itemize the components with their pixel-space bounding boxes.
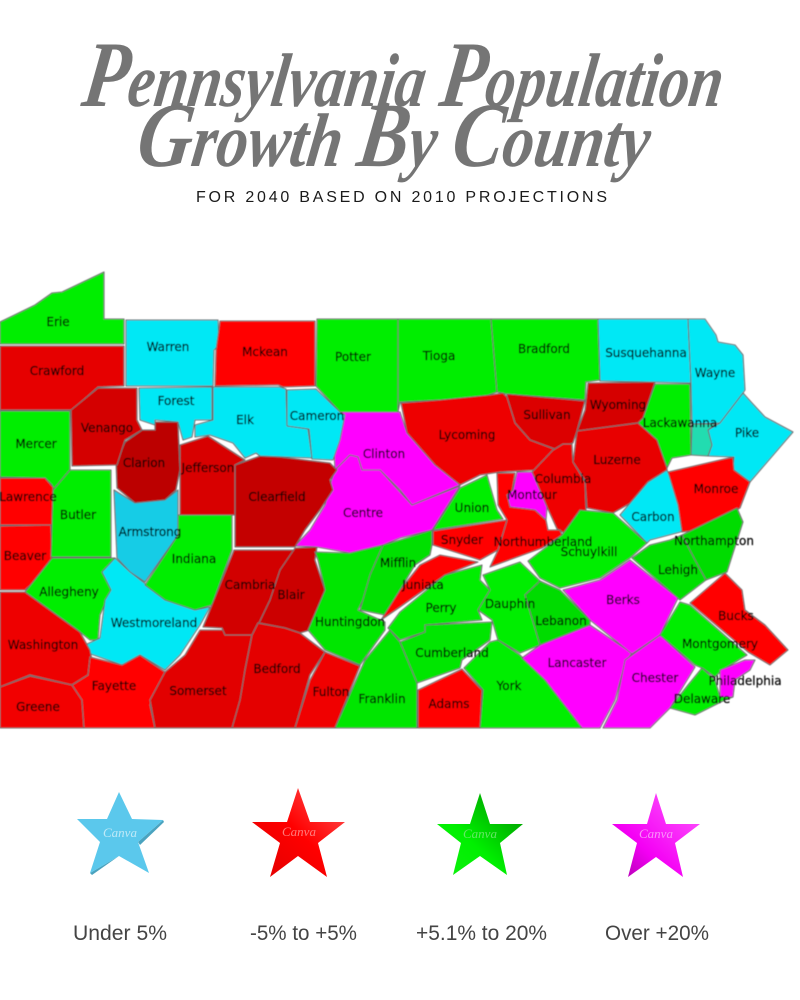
- county: Lawrence: [0, 478, 53, 525]
- county: Juniata: [381, 555, 478, 620]
- county: Washington: [0, 592, 92, 687]
- county: Lancaster: [522, 625, 632, 728]
- county: Fulton: [295, 652, 360, 728]
- county: Sullivan: [507, 394, 585, 449]
- county labels: Indiana: [172, 552, 216, 566]
- county labels: Chester: [632, 671, 678, 685]
- county labels: Clearfield: [248, 490, 306, 504]
- county labels: Berks: [606, 593, 640, 607]
- county: Venango: [71, 388, 142, 466]
- icon: blue star: Canva: [103, 825, 137, 840]
- county: Perry: [388, 565, 490, 640]
- county labels: Cameron: [290, 409, 344, 423]
- county: Franklin: [335, 630, 417, 728]
- county: Beaver: [0, 525, 52, 590]
- county: Snyder: [433, 520, 507, 560]
- label: over +20%: Over +20%: [605, 922, 709, 945]
- county: Lebanon: [525, 581, 590, 645]
- county labels: Potter: [335, 350, 371, 364]
- county: Delaware: [670, 668, 733, 715]
- legend item: -5% to +5%: [250, 788, 357, 945]
- county labels: Franklin: [358, 692, 406, 706]
- county labels: Monroe: [694, 482, 738, 496]
- county labels: Wyoming: [590, 398, 646, 412]
- county labels: Mercer: [15, 437, 57, 451]
- county labels: Mifflin: [380, 556, 416, 570]
- county: Mifflin: [360, 530, 432, 615]
- county: Cambria: [203, 550, 295, 635]
- county: Huntingdon: [308, 545, 385, 665]
- county: Montgomery: [660, 602, 747, 677]
- county labels: Blair: [277, 588, 305, 602]
- legend: [73, 788, 709, 945]
- county: Westmoreland: [85, 558, 210, 670]
- icon: green star: Canva: [463, 826, 497, 841]
- county: Elk: [195, 387, 312, 458]
- county: Adams: [418, 669, 482, 728]
- county labels: Cumberland: [415, 646, 489, 660]
- county labels: Juniata: [401, 578, 444, 592]
- county labels: Washington: [8, 638, 78, 652]
- county labels: Susquehanna: [605, 346, 687, 360]
- county labels: Greene: [16, 700, 60, 714]
- county labels: Clarion: [123, 456, 165, 470]
- icon: red star: [252, 788, 345, 877]
- county: Philadelphia: [720, 660, 755, 697]
- county: Centre: [295, 455, 460, 553]
- county: Bucks: [690, 573, 788, 665]
- county labels: Somerset: [169, 684, 227, 698]
- county: Fayette: [72, 655, 165, 728]
- title: Growth By County: [132, 84, 659, 186]
- county labels: Lebanon: [535, 614, 587, 628]
- county labels: Cambria: [225, 578, 275, 592]
- county labels: Beaver: [4, 549, 46, 563]
- title: Pennsylvania Population: [76, 23, 732, 127]
- county labels: Westmoreland: [111, 616, 197, 630]
- county labels: Bradford: [518, 342, 570, 356]
- county: Wyoming: [577, 382, 655, 431]
- county: Crawford: [0, 346, 124, 410]
- county: Forest: [139, 387, 212, 440]
- county labels: Mckean: [242, 345, 288, 359]
- county labels: Bedford: [253, 662, 301, 676]
- label: under 5%: Under 5%: [73, 922, 167, 945]
- county labels: Forest: [158, 394, 195, 408]
- county labels: Fulton: [313, 685, 349, 699]
- county: Lehigh: [632, 535, 706, 600]
- county: Clearfield: [235, 456, 337, 547]
- county: Tioga: [398, 319, 497, 412]
- county: Jefferson: [180, 436, 245, 515]
- icon: magenta star: [612, 793, 700, 877]
- county labels: Elk: [236, 413, 254, 427]
- county labels: Armstrong: [119, 525, 181, 539]
- county labels: Schuylkill: [561, 545, 617, 559]
- county labels: Union: [455, 501, 489, 515]
- county labels: Lackawanna: [643, 416, 717, 430]
- county: Northampton: [682, 508, 743, 580]
- county labels: Northampton: [674, 534, 754, 548]
- county labels: Luzerne: [593, 453, 641, 467]
- county: Butler: [51, 470, 111, 557]
- county: Dauphin: [478, 562, 540, 653]
- county labels: Perry: [426, 601, 456, 615]
- county labels: Montgomery: [682, 637, 758, 651]
- county labels: Montour: [507, 488, 557, 502]
- county labels: Huntingdon: [315, 615, 385, 629]
- county: Bradford: [491, 319, 600, 400]
- county labels: Erie: [46, 315, 70, 329]
- title: [76, 23, 732, 186]
- icon: blue star: [77, 792, 164, 875]
- county labels: Bucks: [718, 609, 754, 623]
- county: Clarion: [116, 422, 180, 503]
- legend item: over +20%: [605, 793, 709, 945]
- county: Cumberland: [400, 622, 492, 683]
- label: +5.1% to 20%: +5.1% to 20%: [416, 922, 547, 945]
- county labels: Crawford: [30, 364, 84, 378]
- county: Columbia: [532, 444, 586, 535]
- county: Susquehanna: [598, 319, 691, 383]
- county: Armstrong: [114, 490, 178, 582]
- county labels: Tioga: [422, 349, 455, 363]
- county labels: Dauphin: [485, 597, 535, 611]
- county: Lycoming: [401, 393, 554, 485]
- county labels: Butler: [60, 508, 96, 522]
- county labels: Lancaster: [548, 656, 606, 670]
- icon: green star: [437, 793, 523, 875]
- county labels: Lycoming: [439, 428, 495, 442]
- county: Luzerne: [573, 423, 667, 513]
- county: Indiana: [145, 515, 232, 610]
- legend item: +5.1% to 20%: [416, 793, 547, 945]
- county labels: Northumberland: [494, 535, 592, 549]
- county: Montour: [507, 472, 547, 520]
- label: -5% to +5%: -5% to +5%: [250, 922, 357, 945]
- county: Clinton: [334, 412, 460, 505]
- county: Potter: [316, 319, 398, 412]
- county labels: Lawrence: [0, 490, 57, 504]
- county labels: [0, 315, 782, 714]
- county labels: Sullivan: [523, 408, 571, 422]
- county: Somerset: [150, 630, 252, 728]
- county labels: York: [496, 679, 522, 693]
- county labels: Venango: [81, 421, 133, 435]
- county labels: Philadelphia: [708, 674, 782, 688]
- county: Warren: [126, 320, 219, 386]
- county: Bedford: [232, 623, 325, 728]
- county labels: Delaware: [674, 692, 730, 706]
- county: Union: [433, 475, 503, 530]
- county: Erie: [0, 272, 124, 344]
- county: Berks: [563, 560, 678, 654]
- county: Cameron: [287, 389, 345, 460]
- county labels: Clinton: [363, 447, 405, 461]
- county: Wayne: [688, 319, 745, 424]
- county labels: Warren: [147, 340, 189, 354]
- map: Pennsylvania counties: [0, 272, 793, 728]
- county shapes: [0, 272, 793, 728]
- county: Carbon: [620, 470, 688, 543]
- county: Lackawanna east strip: [691, 424, 716, 456]
- county labels: Fayette: [92, 679, 136, 693]
- county: Pike: [708, 393, 793, 482]
- county labels: Wayne: [695, 366, 735, 380]
- county: Allegheny: [25, 558, 115, 640]
- county labels: Adams: [429, 697, 469, 711]
- county: Blair: [259, 547, 325, 633]
- county labels: Jefferson: [181, 461, 234, 475]
- county: Lackawanna: [638, 384, 691, 468]
- icon: red star: Canva: [282, 824, 316, 839]
- county: Schuylkill: [528, 510, 647, 588]
- county: Monroe: [668, 457, 750, 532]
- county: Northumberland: [490, 473, 562, 567]
- icon: magenta star: Canva: [639, 826, 673, 841]
- county labels: Carbon: [631, 510, 675, 524]
- county labels: Allegheny: [39, 585, 99, 599]
- county: McKean: [215, 321, 315, 387]
- county labels: Centre: [343, 506, 383, 520]
- county: Greene: [0, 676, 84, 728]
- county labels: Lehigh: [658, 563, 698, 577]
- county: Mercer: [0, 411, 70, 490]
- county labels: Pike: [735, 426, 759, 440]
- legend item: under 5%: [73, 792, 167, 945]
- county labels: Columbia: [535, 472, 591, 486]
- county labels: Snyder: [441, 533, 483, 547]
- county: Chester: [603, 635, 695, 728]
- subtitle: FOR 2040 BASED ON 2010 PROJECTIONS: [196, 189, 607, 206]
- county: York: [464, 640, 582, 728]
